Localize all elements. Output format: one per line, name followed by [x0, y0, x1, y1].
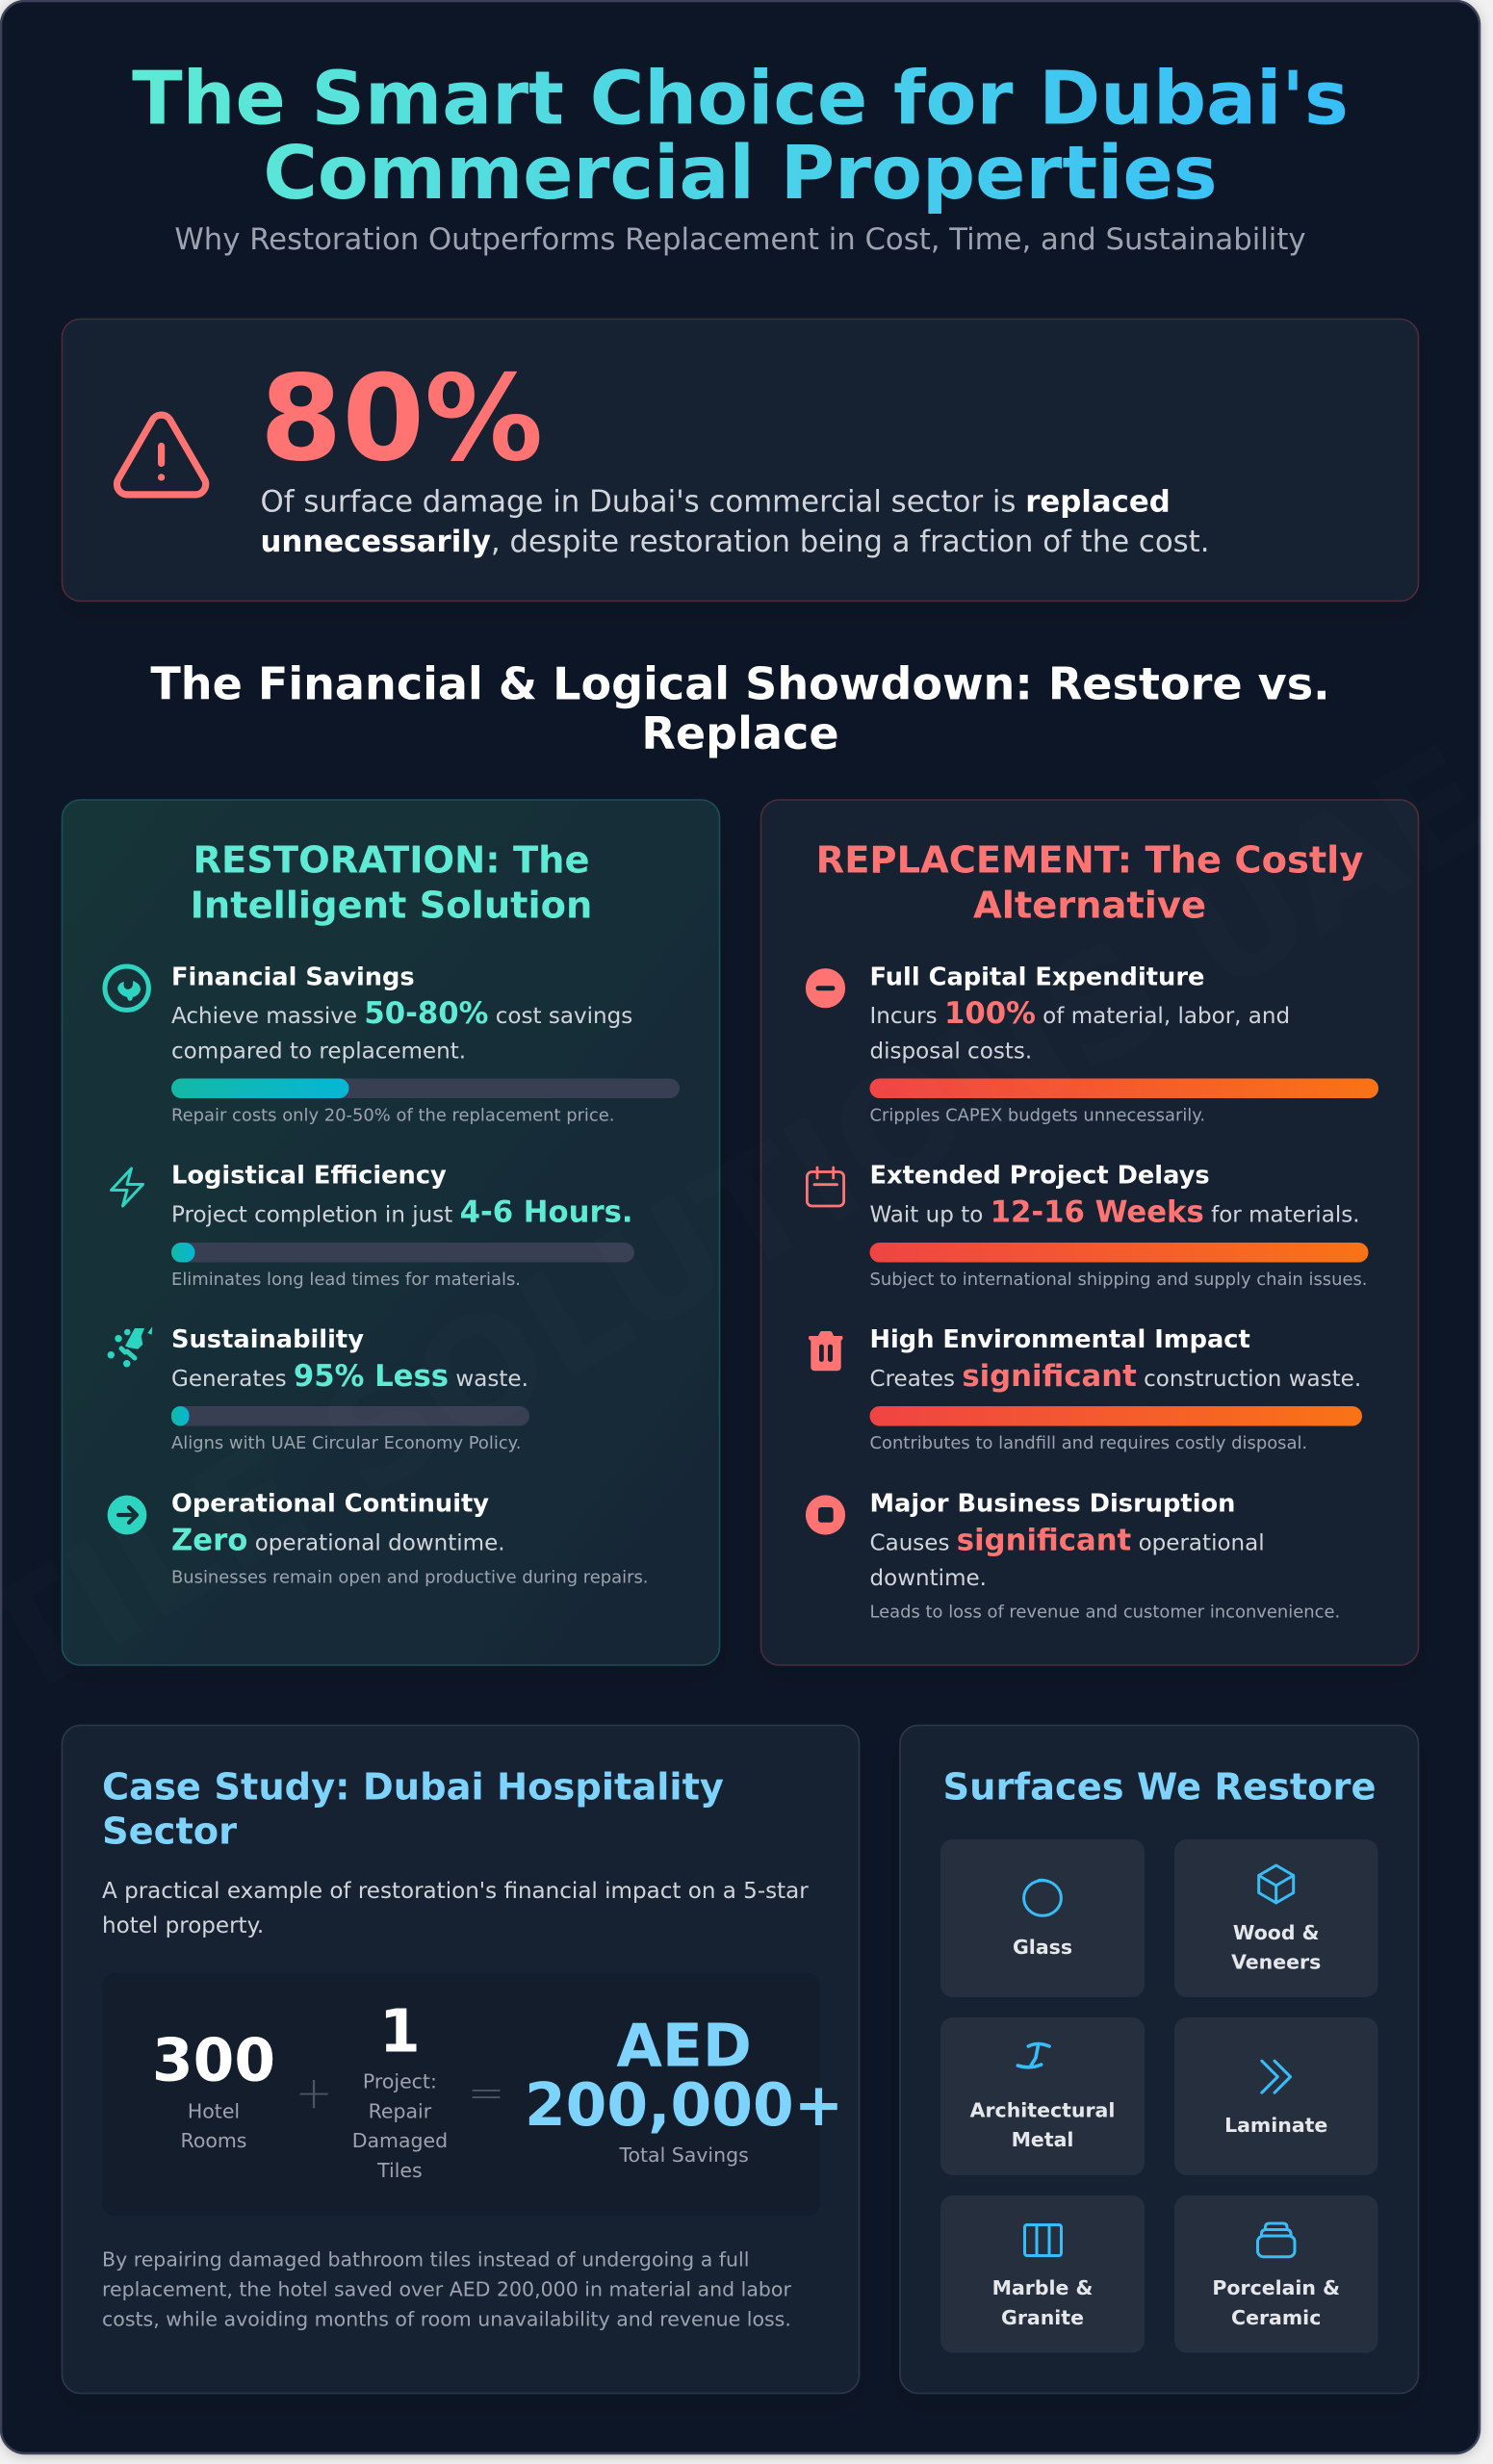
item: capital expenditure: Full Capital Expenditure: [870, 963, 1204, 992]
tile: glass: [940, 1839, 1145, 1997]
stat: total savings: AED: [616, 2013, 752, 2081]
case study conclusion: [102, 2248, 791, 2330]
stat: 300 hotel rooms: Hotel: [188, 2099, 240, 2122]
header: [132, 56, 1349, 257]
panel: 80% hero stat: [62, 320, 1419, 601]
plus sign: +: [296, 2066, 332, 2118]
item: capital expenditure: disposal costs.: [870, 1040, 1032, 1065]
icon: calendar: [807, 1168, 844, 1206]
bar: waste: [870, 1406, 1362, 1426]
equals sign: =: [468, 2066, 504, 2118]
icon: stack: [1257, 2223, 1295, 2257]
stat: 300 hotel rooms: [152, 2027, 275, 2152]
title: Commercial Properties: [263, 131, 1218, 217]
case study conclusion: By repairing damaged bathroom tiles instead of undergoing a full: [102, 2248, 749, 2272]
bar: waste: [171, 1406, 529, 1426]
icon: stop circle: [806, 1495, 845, 1535]
icon: bolt: [112, 1168, 142, 1206]
tile: marble: [940, 2195, 1145, 2352]
icon: cube: [1259, 1865, 1294, 1903]
icon: savings: [105, 966, 148, 1010]
item: operational continuity: Zero operational downtime.: [171, 1524, 505, 1558]
item: sustainability: Generates 95% Less waste.: [171, 1359, 528, 1394]
item: operational continuity: Businesses remain open and productive during repairs.: [171, 1567, 648, 1588]
case study heading: [102, 1765, 724, 1854]
tile: metal: [940, 2017, 1145, 2175]
item: project delays: Wait up to 12-16 Weeks for materials.: [870, 1195, 1360, 1230]
stat: 1 project: Damaged: [352, 2129, 448, 2152]
tile: porcelain: Ceramic: [1231, 2306, 1321, 2329]
item: sustainability: Sustainability: [171, 1325, 364, 1354]
replacement heading: [816, 839, 1363, 928]
item: project delays: Subject to international shipping and supply chain issues.: [870, 1270, 1367, 1290]
panel: replacement: [760, 800, 1419, 1665]
restoration heading: RESTORATION: The: [193, 839, 590, 882]
item: environmental impact: [809, 1325, 1362, 1453]
tile: wood: Veneers: [1231, 1951, 1321, 1974]
item: logistical efficiency: Project completion in just 4-6 Hours.: [171, 1195, 633, 1230]
item: financial savings: Achieve massive 50-80% cost savings: [171, 996, 632, 1031]
item: logistical efficiency: Eliminates long lead times for materials.: [171, 1270, 521, 1290]
tile: metal: Metal: [1012, 2128, 1073, 2151]
tile: laminate: [1174, 2017, 1378, 2175]
item: business disruption: [806, 1490, 1340, 1623]
item: financial savings: [105, 963, 680, 1126]
hero statement: unnecessarily, despite restoration being a fraction of the cost.: [260, 525, 1210, 559]
stat: 300 hotel rooms: Rooms: [181, 2129, 246, 2152]
bar: lead time: [171, 1243, 634, 1263]
stat: total savings: [525, 2013, 843, 2167]
item: business disruption: Leads to loss of revenue and customer inconvenience.: [870, 1602, 1340, 1623]
bar: repair cost: [171, 1078, 680, 1098]
item: sustainability: Aligns with UAE Circular Economy Policy.: [171, 1433, 521, 1453]
icon: double chevron: [1262, 2061, 1291, 2092]
equation box: [102, 1973, 843, 2216]
item: business disruption: downtime.: [870, 1566, 987, 1591]
surfaces heading: Surfaces We Restore: [942, 1765, 1377, 1810]
item: capital expenditure: Incurs 100% of material, labor, and: [870, 996, 1290, 1031]
icon: recycling blob: [108, 1326, 152, 1367]
case study heading: Sector: [102, 1810, 237, 1854]
icon: arrow circle: [108, 1496, 146, 1534]
bar: capex: [870, 1078, 1378, 1098]
item: sustainability: [108, 1325, 529, 1453]
case study conclusion: costs, while avoiding months of room unavailability and revenue loss.: [102, 2307, 791, 2330]
icon: metal: [1017, 2044, 1049, 2067]
stat: 1 project: Project:: [363, 2070, 437, 2093]
stat: 1 project: Repair: [369, 2099, 432, 2122]
item: financial savings: Financial Savings: [171, 963, 415, 992]
case study intro: hotel property.: [102, 1913, 264, 1938]
tile: metal: Architectural: [970, 2098, 1115, 2121]
replacement heading: REPLACEMENT: The Costly: [816, 839, 1363, 882]
item: project delays: Extended Project Delays: [870, 1162, 1210, 1191]
item: environmental impact: High Environmental Impact: [870, 1325, 1250, 1354]
item: business disruption: Major Business Disruption: [870, 1490, 1235, 1519]
item: environmental impact: Contributes to landfill and requires costly disposal.: [870, 1433, 1307, 1453]
icon: warning triangle: [116, 415, 206, 495]
subtitle: Why Restoration Outperforms Replacement in Cost, Time, and Sustainability: [174, 222, 1306, 257]
big number 80%: 80%: [260, 350, 543, 487]
tile: porcelain: [1174, 2195, 1378, 2352]
hero statement: Of surface damage in Dubai's commercial sector is replaced: [260, 485, 1171, 520]
item: business disruption: Causes significant operational: [870, 1524, 1265, 1558]
item: financial savings: compared to replacement.: [171, 1040, 466, 1065]
restoration heading: [191, 839, 592, 928]
item: operational continuity: [108, 1490, 648, 1588]
section heading: showdown: Replace: [641, 707, 839, 759]
stat: total savings: Total Savings: [618, 2143, 749, 2167]
stat: 1 project: [352, 1998, 448, 2182]
item: financial savings: Repair costs only 20-50% of the replacement price.: [171, 1105, 614, 1126]
title: The Smart Choice for Dubai's: [132, 56, 1349, 142]
title: [132, 56, 1349, 217]
case study intro: [102, 1879, 809, 1938]
case study conclusion: replacement, the hotel saved over AED 200,000 in material and labor: [102, 2277, 791, 2300]
tile: porcelain: Porcelain &: [1212, 2276, 1340, 2299]
panel: case study: [62, 1725, 859, 2393]
panel: surfaces: [900, 1725, 1419, 2393]
icon: trash: [809, 1331, 843, 1371]
bar: delays: [870, 1243, 1369, 1263]
tile: glass: Glass: [1013, 1936, 1072, 1959]
tile: wood: [1174, 1839, 1378, 1997]
item: logistical efficiency: Logistical Efficiency: [171, 1162, 447, 1191]
stat: 1 project: Tiles: [376, 2159, 423, 2182]
case study heading: Case Study: Dubai Hospitality: [102, 1765, 724, 1810]
stat: 300 hotel rooms: 300: [152, 2027, 275, 2095]
panel: restoration: [62, 800, 720, 1665]
item: logistical efficiency: [112, 1162, 634, 1290]
section heading: showdown: The Financial & Logical Showdown: Restore vs.: [150, 658, 1330, 710]
stat: 1 project: 1: [379, 1998, 421, 2066]
item: capital expenditure: [806, 963, 1378, 1126]
tile: laminate: Laminate: [1224, 2114, 1327, 2137]
tile: marble: Granite: [1001, 2306, 1084, 2329]
icon: columns: [1024, 2225, 1061, 2256]
hero statement: [260, 485, 1210, 559]
item: capital expenditure: Cripples CAPEX budgets unnecessarily.: [870, 1105, 1205, 1126]
restoration heading: Intelligent Solution: [191, 884, 592, 928]
tile: marble: Marble &: [992, 2276, 1093, 2299]
item: project delays: [807, 1162, 1369, 1290]
replacement heading: Alternative: [973, 884, 1206, 928]
section heading: showdown: [150, 658, 1330, 759]
stat: total savings: 200,000+: [525, 2071, 843, 2140]
item: environmental impact: Creates significant construction waste.: [870, 1359, 1361, 1394]
case study intro: A practical example of restoration's financial impact on a 5-star: [102, 1879, 809, 1904]
item: operational continuity: Operational Continuity: [171, 1490, 489, 1519]
tile: wood: Wood &: [1233, 1921, 1320, 1944]
icon: minus circle: [806, 968, 845, 1008]
icon: glass: [1024, 1880, 1061, 1915]
